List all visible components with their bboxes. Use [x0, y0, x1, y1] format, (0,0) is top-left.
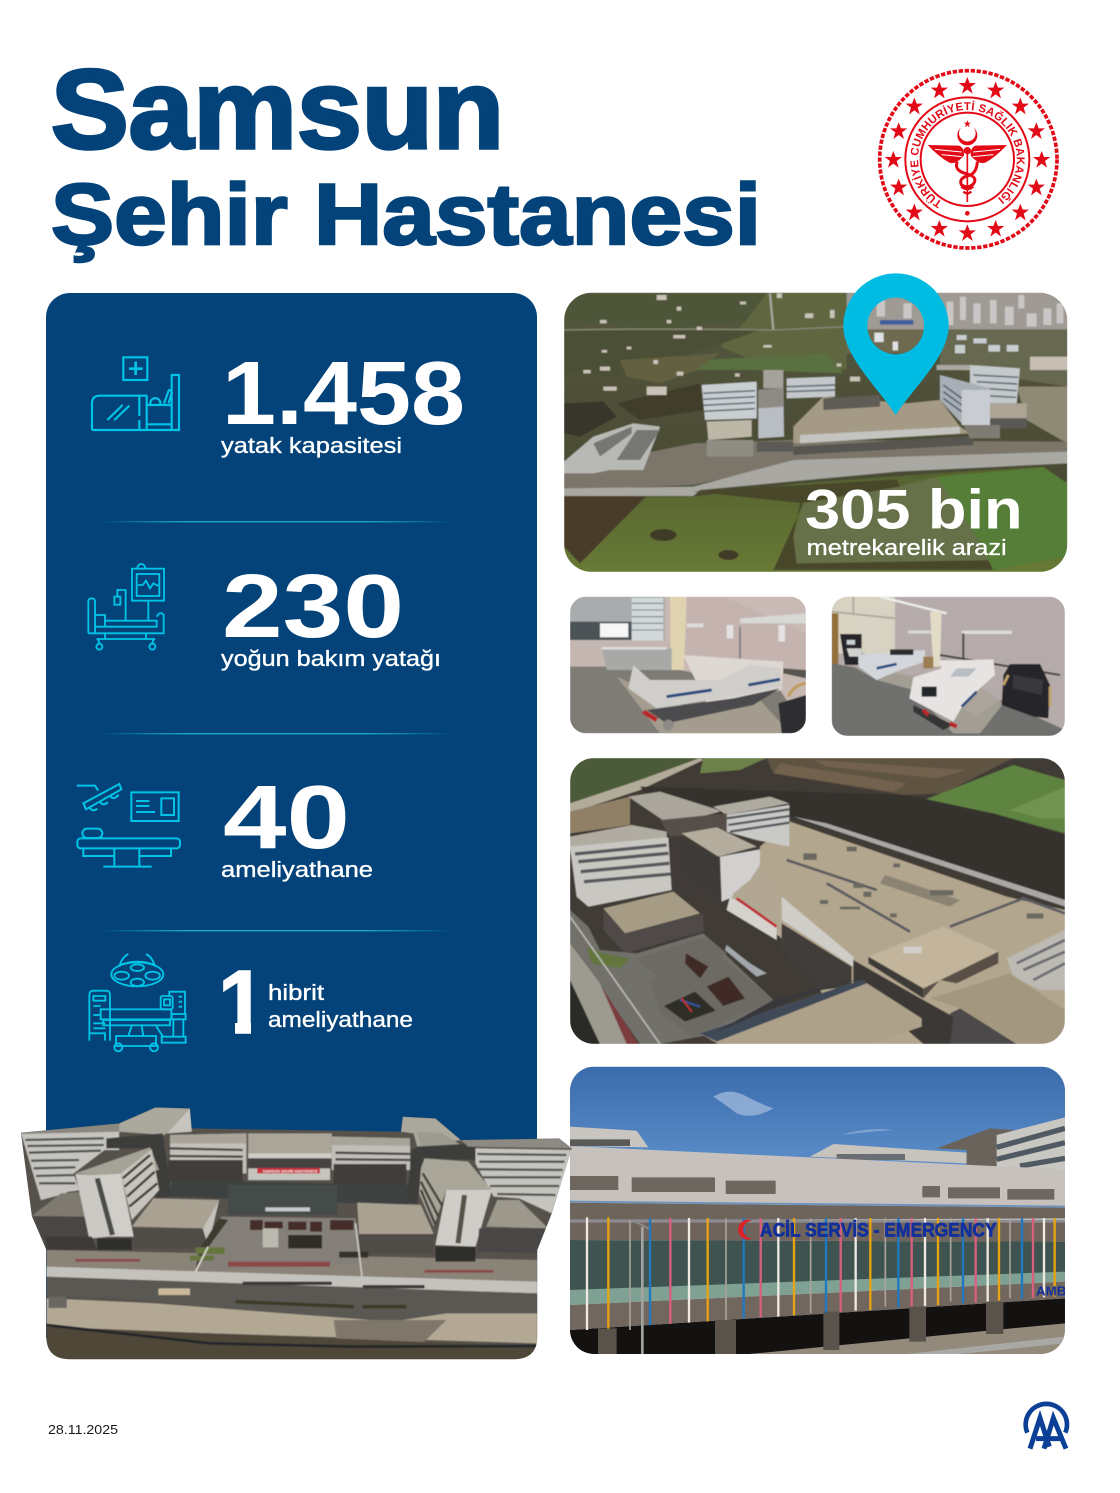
stat: bed capacity: 1.458	[222, 344, 465, 444]
photo: hospital roof aerial	[570, 758, 1065, 1044]
panel: key figures	[46, 293, 537, 1359]
stat: hybrid operating room: hibrit	[268, 980, 324, 1005]
stat: hybrid operating room	[214, 953, 413, 1053]
photo: patient room right	[832, 597, 1065, 736]
stat: operating rooms: ameliyathane	[221, 857, 373, 882]
stat: land area: metrekarelik arazi	[807, 535, 1007, 560]
stat: land area	[805, 478, 1023, 560]
stat: intensive care beds: yoğun bakım yatağı	[221, 646, 441, 671]
stat: operating rooms	[221, 768, 373, 882]
title: Samsun	[51, 47, 504, 172]
stat: intensive care beds	[221, 557, 441, 671]
date: 28.11.2025	[48, 1423, 118, 1437]
stat: land area: 305 bin	[805, 478, 1023, 540]
stat: hybrid operating room: 1	[218, 953, 266, 1053]
photo: emergency department entrance	[570, 1067, 1112, 1354]
stat: bed capacity: yatak kapasitesi	[221, 433, 402, 458]
icon: hospital bed with cross	[92, 357, 179, 430]
photo: hospital front cut-out: SAMSUN ŞEHİR HASTANESİ	[263, 1169, 317, 1173]
icon: hybrid operating room	[89, 954, 186, 1051]
photo: emergency department entrance: ACİL SERVİS - EMERGENCY	[760, 1219, 997, 1242]
stat: operating rooms: 40	[223, 768, 350, 868]
stat: intensive care beds: 230	[222, 557, 404, 657]
icon: intensive care bed	[88, 564, 164, 650]
logo: Ministry of Health seal	[878, 68, 1059, 250]
title: Şehir Hastanesi	[51, 167, 761, 263]
photo: patient room left	[570, 597, 806, 733]
title	[51, 47, 761, 263]
photo: emergency department entrance: AMBULANS	[1036, 1283, 1112, 1298]
logo: Ministry of Health seal: TÜRKİYE CUMHURİYETİ SAĞLIK BAKANLIĞI	[910, 100, 1025, 208]
logo: Anadolu Agency	[1026, 1404, 1067, 1449]
divider lines	[100, 521, 452, 931]
photo: aerial view of the construction site	[564, 273, 1067, 572]
map pin	[843, 273, 949, 415]
stat: hybrid operating room: ameliyathane	[268, 1007, 413, 1032]
icon: operating table	[77, 784, 180, 867]
photo: hospital front cut-out	[10, 1103, 580, 1363]
